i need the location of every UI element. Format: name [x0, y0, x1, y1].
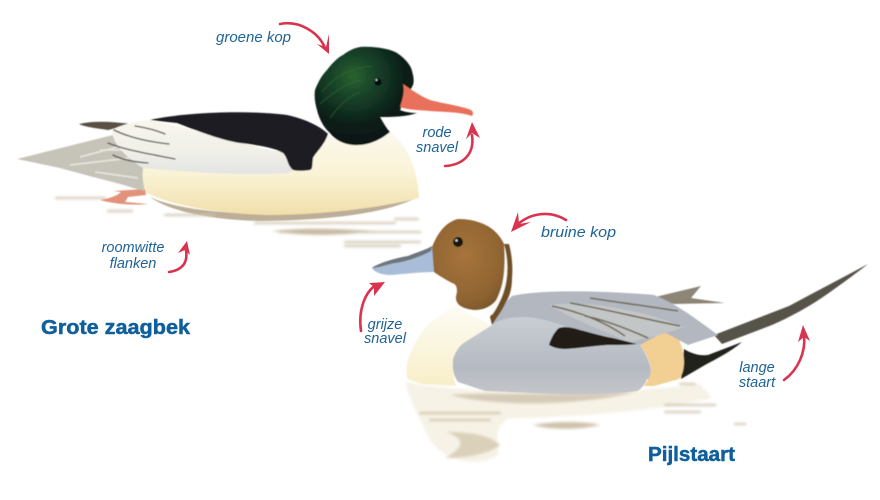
label: rode snavel: snavel — [416, 140, 459, 156]
green head — [315, 47, 417, 145]
feet — [100, 189, 148, 205]
label: groene kop: groene kop — [216, 30, 291, 46]
body — [143, 132, 419, 215]
label: lange staart: staart — [739, 375, 776, 391]
arrow: bruine kop — [511, 212, 566, 232]
black tail tip — [79, 122, 133, 130]
arrow: rode snavel — [445, 122, 480, 166]
label: grijze snavel: grijze — [368, 317, 402, 333]
label: bruine kop: bruine kop — [541, 225, 616, 241]
red bill — [400, 84, 473, 116]
buff rear patch — [640, 330, 684, 386]
grey bill — [372, 246, 434, 275]
cream breast — [406, 305, 492, 386]
scapular feathers — [549, 298, 684, 342]
white neck stripe — [490, 244, 512, 325]
grey flank — [453, 317, 651, 395]
head sheen — [320, 66, 372, 118]
water reflection: Grote zaagbek — [56, 197, 420, 246]
eye — [453, 237, 463, 247]
white flank and wing — [112, 120, 293, 174]
arrow: lange staart — [784, 325, 810, 380]
black undertail — [681, 342, 742, 379]
grey back — [492, 291, 718, 345]
label: roomwitte flanken: flanken — [110, 256, 156, 272]
label: grijze snavel: snavel — [364, 331, 407, 347]
title: Grote zaagbek: Grote zaagbek — [41, 317, 191, 339]
back feathers tip — [651, 286, 725, 304]
brown head — [431, 219, 507, 310]
water reflection: Pijlstaart — [405, 382, 745, 462]
arrow: groene kop — [280, 23, 329, 54]
label: roomwitte flanken: roomwitte — [102, 240, 164, 256]
long tail — [714, 264, 868, 344]
grey tail — [17, 135, 145, 191]
eye — [374, 78, 382, 86]
illustration: Grote zaagbek duck — [17, 47, 473, 246]
arrow: roomwitte flanken — [169, 241, 190, 272]
label: rode snavel: rode — [422, 125, 452, 141]
arrow: grijze snavel — [360, 282, 385, 331]
illustration: Pijlstaart duck — [372, 219, 868, 462]
wing feathers — [108, 126, 175, 163]
label: lange staart: lange — [739, 360, 775, 376]
title: Pijlstaart: Pijlstaart — [648, 444, 735, 466]
black back — [150, 112, 328, 171]
black wing patch — [549, 327, 637, 349]
